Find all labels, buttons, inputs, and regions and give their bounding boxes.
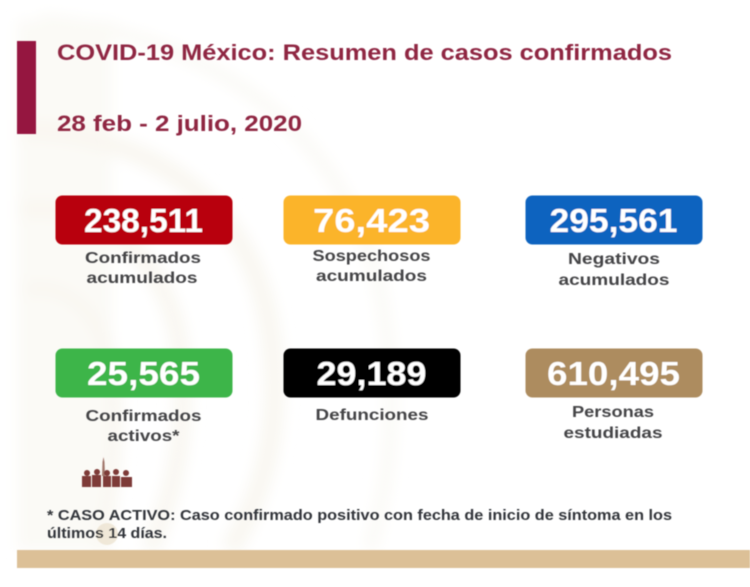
stat: sospechosos acumulados: 76,423 [313,202,430,239]
stat: confirmados activos: activos* [108,428,180,445]
stat: negativos acumulados: acumulados [558,272,670,289]
stat: personas estudiadas: estudiadas [564,425,663,442]
footer band [17,550,750,568]
stat: personas estudiadas [526,348,702,442]
footnote [47,507,672,542]
stat: confirmados acumulados: 238,511 [84,202,203,239]
stat: negativos acumulados: 295,561 [550,202,678,239]
title accent bar [17,41,36,134]
stat: defunciones [284,348,460,424]
stat: sospechosos acumulados [284,196,460,285]
stat: defunciones: 29,189 [316,355,426,392]
stat: confirmados acumulados: Confirmados [85,250,201,267]
icon: faint watermark circle [96,523,118,545]
stat: confirmados activos: 25,565 [87,355,200,392]
stat: personas estudiadas: 610,495 [547,355,680,392]
stat: sospechosos acumulados: acumulados [316,268,427,285]
footnote: * CASO ACTIVO: Caso confirmado positivo con fecha de inicio de síntoma en los [47,507,672,524]
title: COVID-19 México: Resumen de casos confirmados [57,40,672,65]
stat: negativos acumulados [526,196,702,289]
date range: 28 feb - 2 julio, 2020 [57,111,302,136]
stat: confirmados activos: Confirmados [86,408,202,425]
stat: confirmados acumulados: acumulados [86,270,198,287]
footnote: últimos 14 días. [47,525,167,542]
stat: defunciones: Defunciones [316,407,429,424]
stat: confirmados acumulados [56,196,232,287]
icon: historical figures logo [82,457,132,487]
stat: confirmados activos [56,348,232,445]
stat: negativos acumulados: Negativos [568,251,660,268]
stat: sospechosos acumulados: Sospechosos [312,248,431,265]
stat: personas estudiadas: Personas [572,404,654,421]
